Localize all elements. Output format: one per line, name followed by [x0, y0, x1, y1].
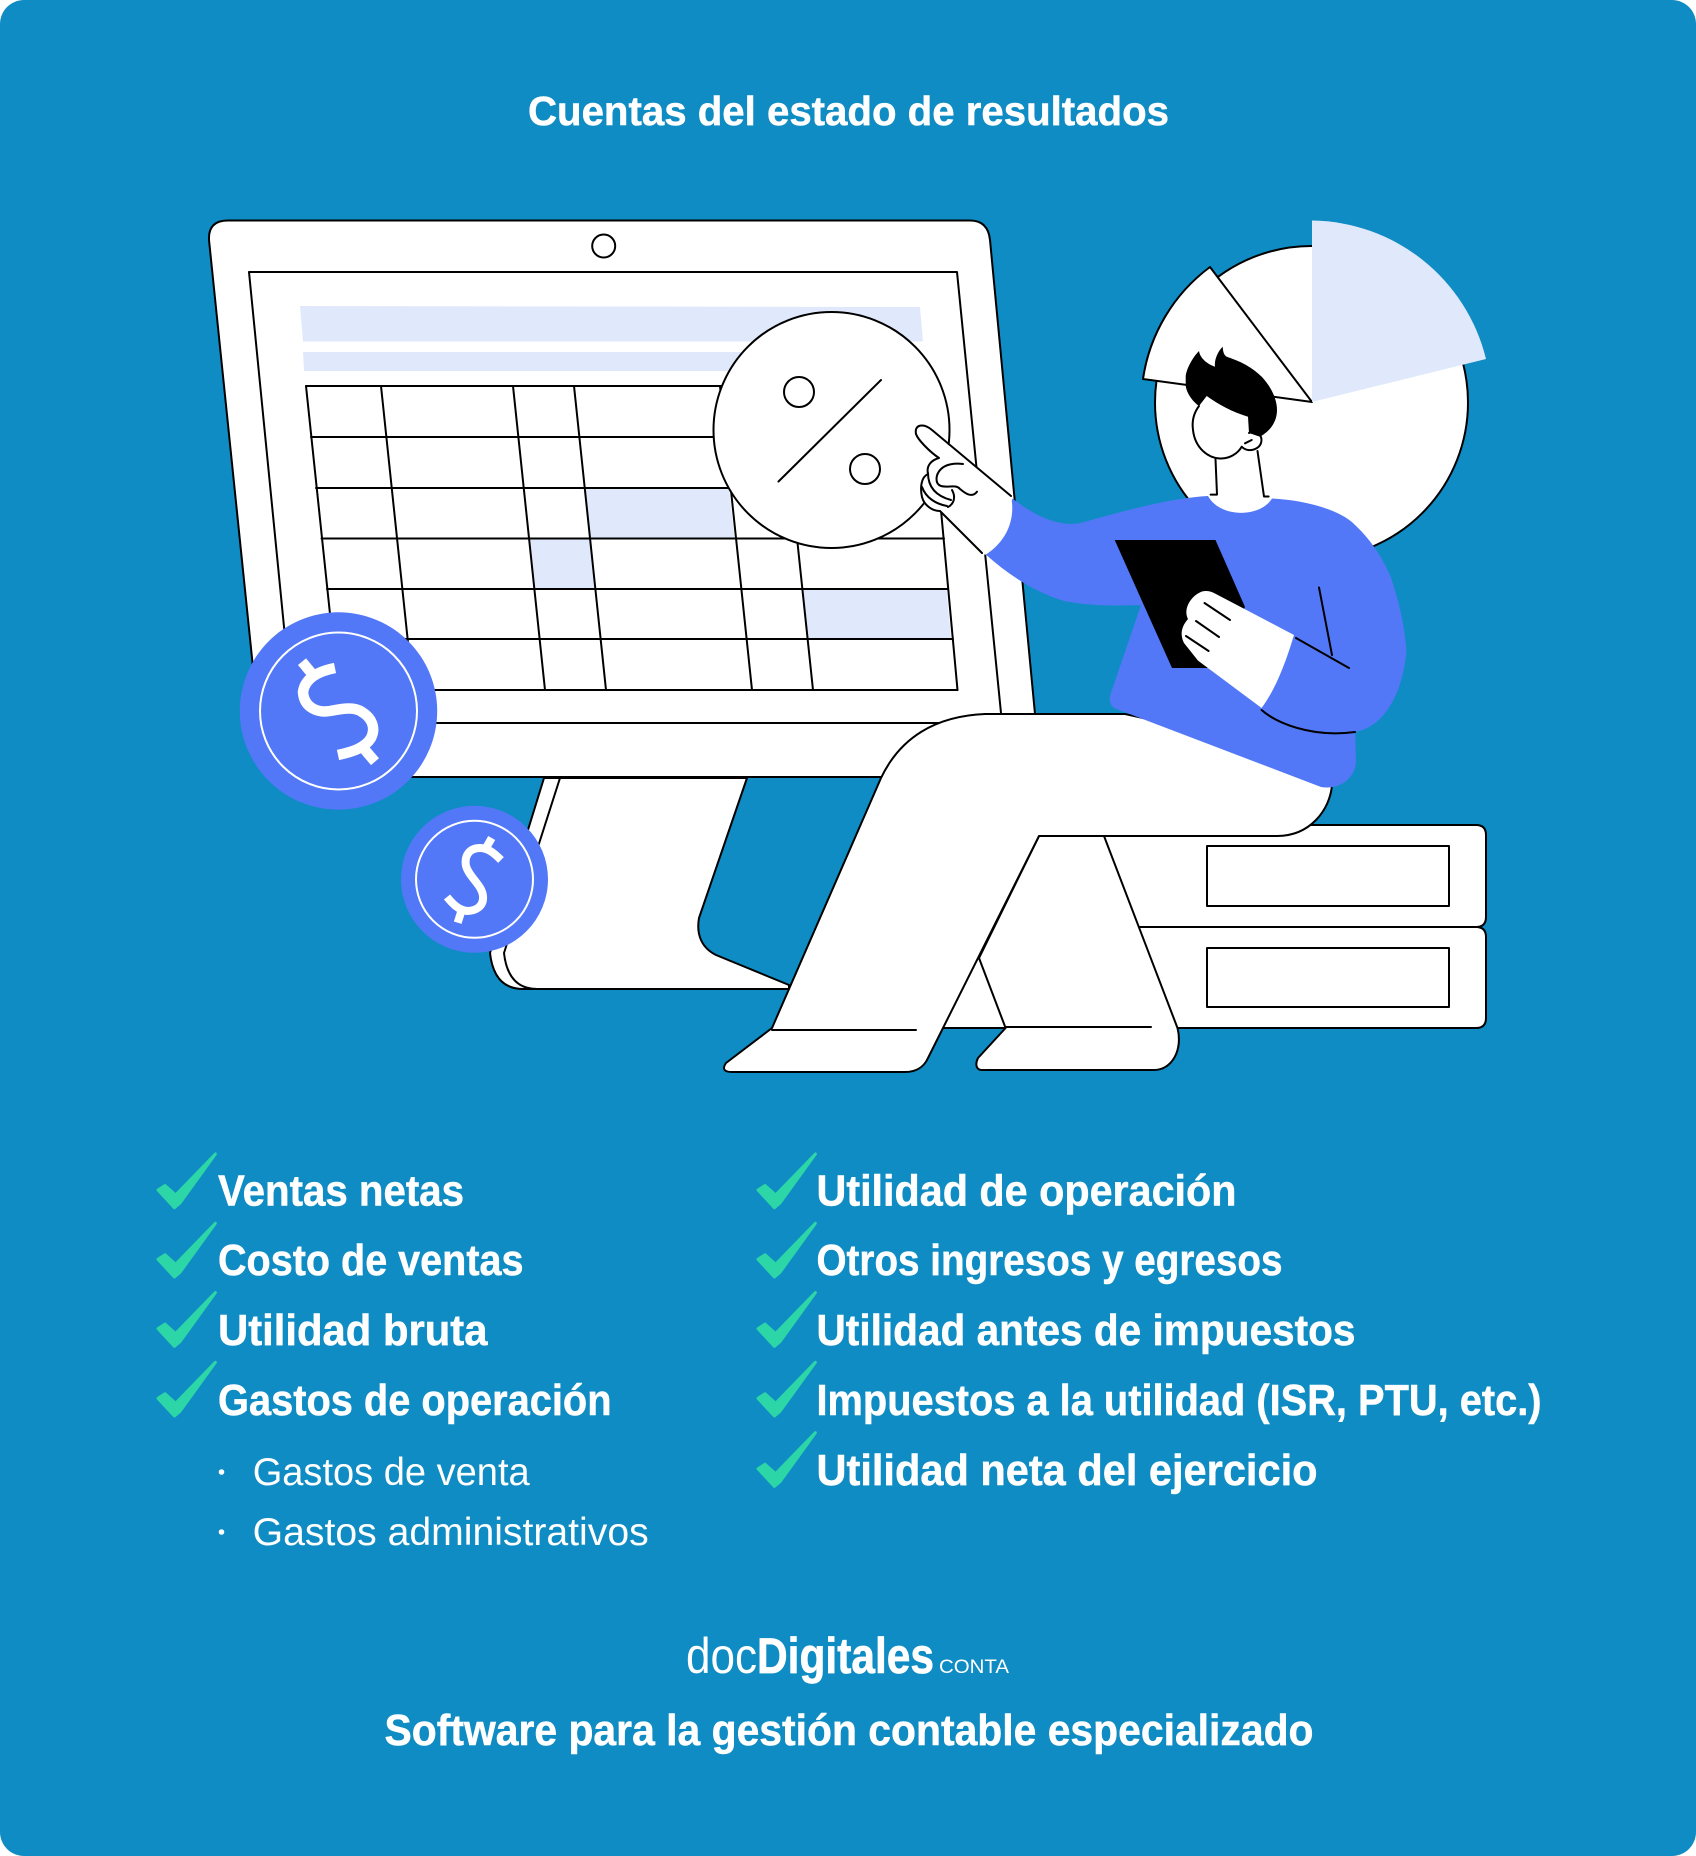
check item: Utilidad de operación	[758, 1154, 1236, 1216]
check item: Utilidad antes de impuestos	[758, 1293, 1356, 1355]
check item: Gastos de operación: Gastos de operación	[218, 1376, 612, 1425]
check item: Otros ingresos y egresos	[758, 1223, 1282, 1285]
check item: Impuestos a la utilidad	[758, 1362, 1542, 1425]
check item: Ventas netas: Ventas netas	[218, 1167, 464, 1216]
sub item: Gastos de venta: Gastos de venta	[253, 1451, 530, 1494]
logo: Digitales	[757, 1628, 934, 1684]
monitor	[209, 220, 1040, 777]
spreadsheet	[300, 306, 958, 690]
check item: Impuestos a la utilidad: Impuestos a la utilidad (ISR, PTU, etc.)	[816, 1376, 1542, 1425]
check item: Utilidad neta del ejercicio	[758, 1433, 1318, 1495]
title: Cuentas del estado de resultados	[528, 88, 1169, 134]
check item: Costo de ventas	[158, 1223, 524, 1285]
tablet	[1115, 540, 1245, 668]
person head	[1186, 347, 1277, 496]
illustration	[209, 220, 1486, 1072]
books	[940, 825, 1486, 1028]
pointing hand	[916, 425, 1012, 555]
check item: Costo de ventas: Costo de ventas	[218, 1236, 524, 1285]
check item: Gastos de operación	[158, 1362, 612, 1425]
holding hand	[1182, 591, 1294, 708]
check item: Utilidad de operación: Utilidad de operación	[816, 1167, 1236, 1216]
monitor stand	[490, 778, 789, 989]
check item: Utilidad bruta: Utilidad bruta	[218, 1306, 488, 1355]
check item: Ventas netas	[158, 1154, 464, 1216]
footer tagline: Software para la gestión contable especializado	[384, 1706, 1314, 1755]
checklist right	[758, 1154, 1542, 1495]
monitor camera	[592, 234, 615, 258]
check item: Utilidad neta del ejercicio: Utilidad neta del ejercicio	[816, 1446, 1318, 1495]
logo	[686, 1628, 1009, 1684]
person sweater	[986, 496, 1406, 787]
percent badge	[714, 312, 950, 548]
large dollar coin	[240, 612, 437, 810]
logo: CONTA	[939, 1657, 1009, 1678]
person legs	[724, 714, 1332, 1072]
checklist left	[158, 1154, 649, 1554]
check item: Utilidad antes de impuestos: Utilidad antes de impuestos	[816, 1306, 1356, 1355]
check item: Otros ingresos y egresos: Otros ingresos y egresos	[816, 1236, 1282, 1285]
check item: Utilidad bruta	[158, 1293, 488, 1355]
logo: doc	[686, 1628, 757, 1684]
sub item: Gastos administrativos: Gastos administrativos	[253, 1511, 649, 1554]
small dollar coin	[401, 806, 548, 953]
pie chart	[1143, 220, 1486, 559]
monitor screen	[249, 272, 1002, 723]
